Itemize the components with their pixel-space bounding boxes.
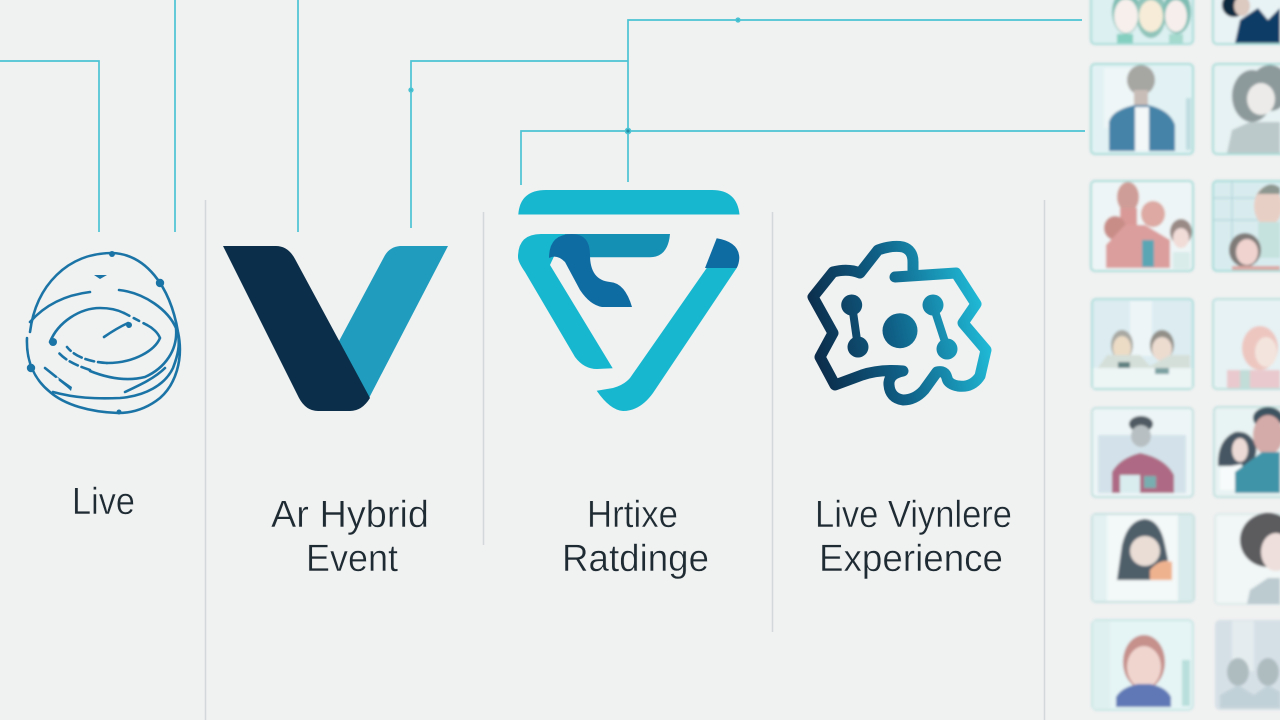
label: live virtual experience: Experience bbox=[819, 538, 1003, 580]
thumbnail: man in burgundy sweater bbox=[1092, 408, 1193, 497]
thumbnail: curly haired woman bbox=[1215, 513, 1280, 604]
thumbnail: couple in navy bbox=[1213, 0, 1280, 44]
icon: globe rings bbox=[27, 251, 180, 414]
icon: puzzle gear bbox=[813, 246, 986, 400]
thumbnail: group in red bbox=[1091, 181, 1193, 271]
thumbnail: three faces bbox=[1091, 0, 1193, 44]
top bar bbox=[518, 190, 740, 214]
label: live: Live bbox=[72, 481, 135, 523]
icon: triangle logo bbox=[518, 190, 740, 411]
dark cap bbox=[705, 238, 739, 268]
label: a hybrid event: Event bbox=[306, 538, 398, 580]
label: third column: Ratdinge bbox=[562, 538, 709, 580]
blue inner bar bbox=[560, 234, 670, 257]
thumbnail: pale person in pink bbox=[1213, 299, 1280, 389]
thumbnail: man in blue jacket bbox=[1091, 64, 1193, 154]
right arm bbox=[597, 268, 737, 411]
dark blue hook bbox=[549, 234, 632, 307]
label: a hybrid event bbox=[271, 494, 429, 580]
thumbnail: dark haired woman bbox=[1092, 514, 1194, 602]
thumbnail: two pale figures bbox=[1215, 620, 1280, 710]
thumbnail: woman with curly hair bbox=[1213, 64, 1280, 154]
label: live virtual experience bbox=[815, 494, 1012, 580]
thumbnail: two men bbox=[1092, 299, 1193, 389]
label: a hybrid event: Ar Hybrid bbox=[271, 494, 429, 536]
label: third column bbox=[562, 494, 709, 580]
thumbnail: red haired person bbox=[1092, 620, 1193, 710]
thumbnail: window and pair bbox=[1213, 181, 1280, 271]
label: live virtual experience: Live Viynlere bbox=[815, 494, 1012, 536]
connector lines bbox=[0, 0, 1085, 232]
icon: V logo bbox=[223, 246, 448, 411]
thumbnail: woman and man in teal bbox=[1214, 407, 1280, 497]
left arm bbox=[518, 234, 613, 369]
V right arm bbox=[338, 246, 448, 400]
label: third column: Hrtixe bbox=[587, 494, 678, 536]
V left arm bbox=[223, 246, 370, 411]
panel: attendee thumbnails bbox=[1091, 0, 1280, 710]
